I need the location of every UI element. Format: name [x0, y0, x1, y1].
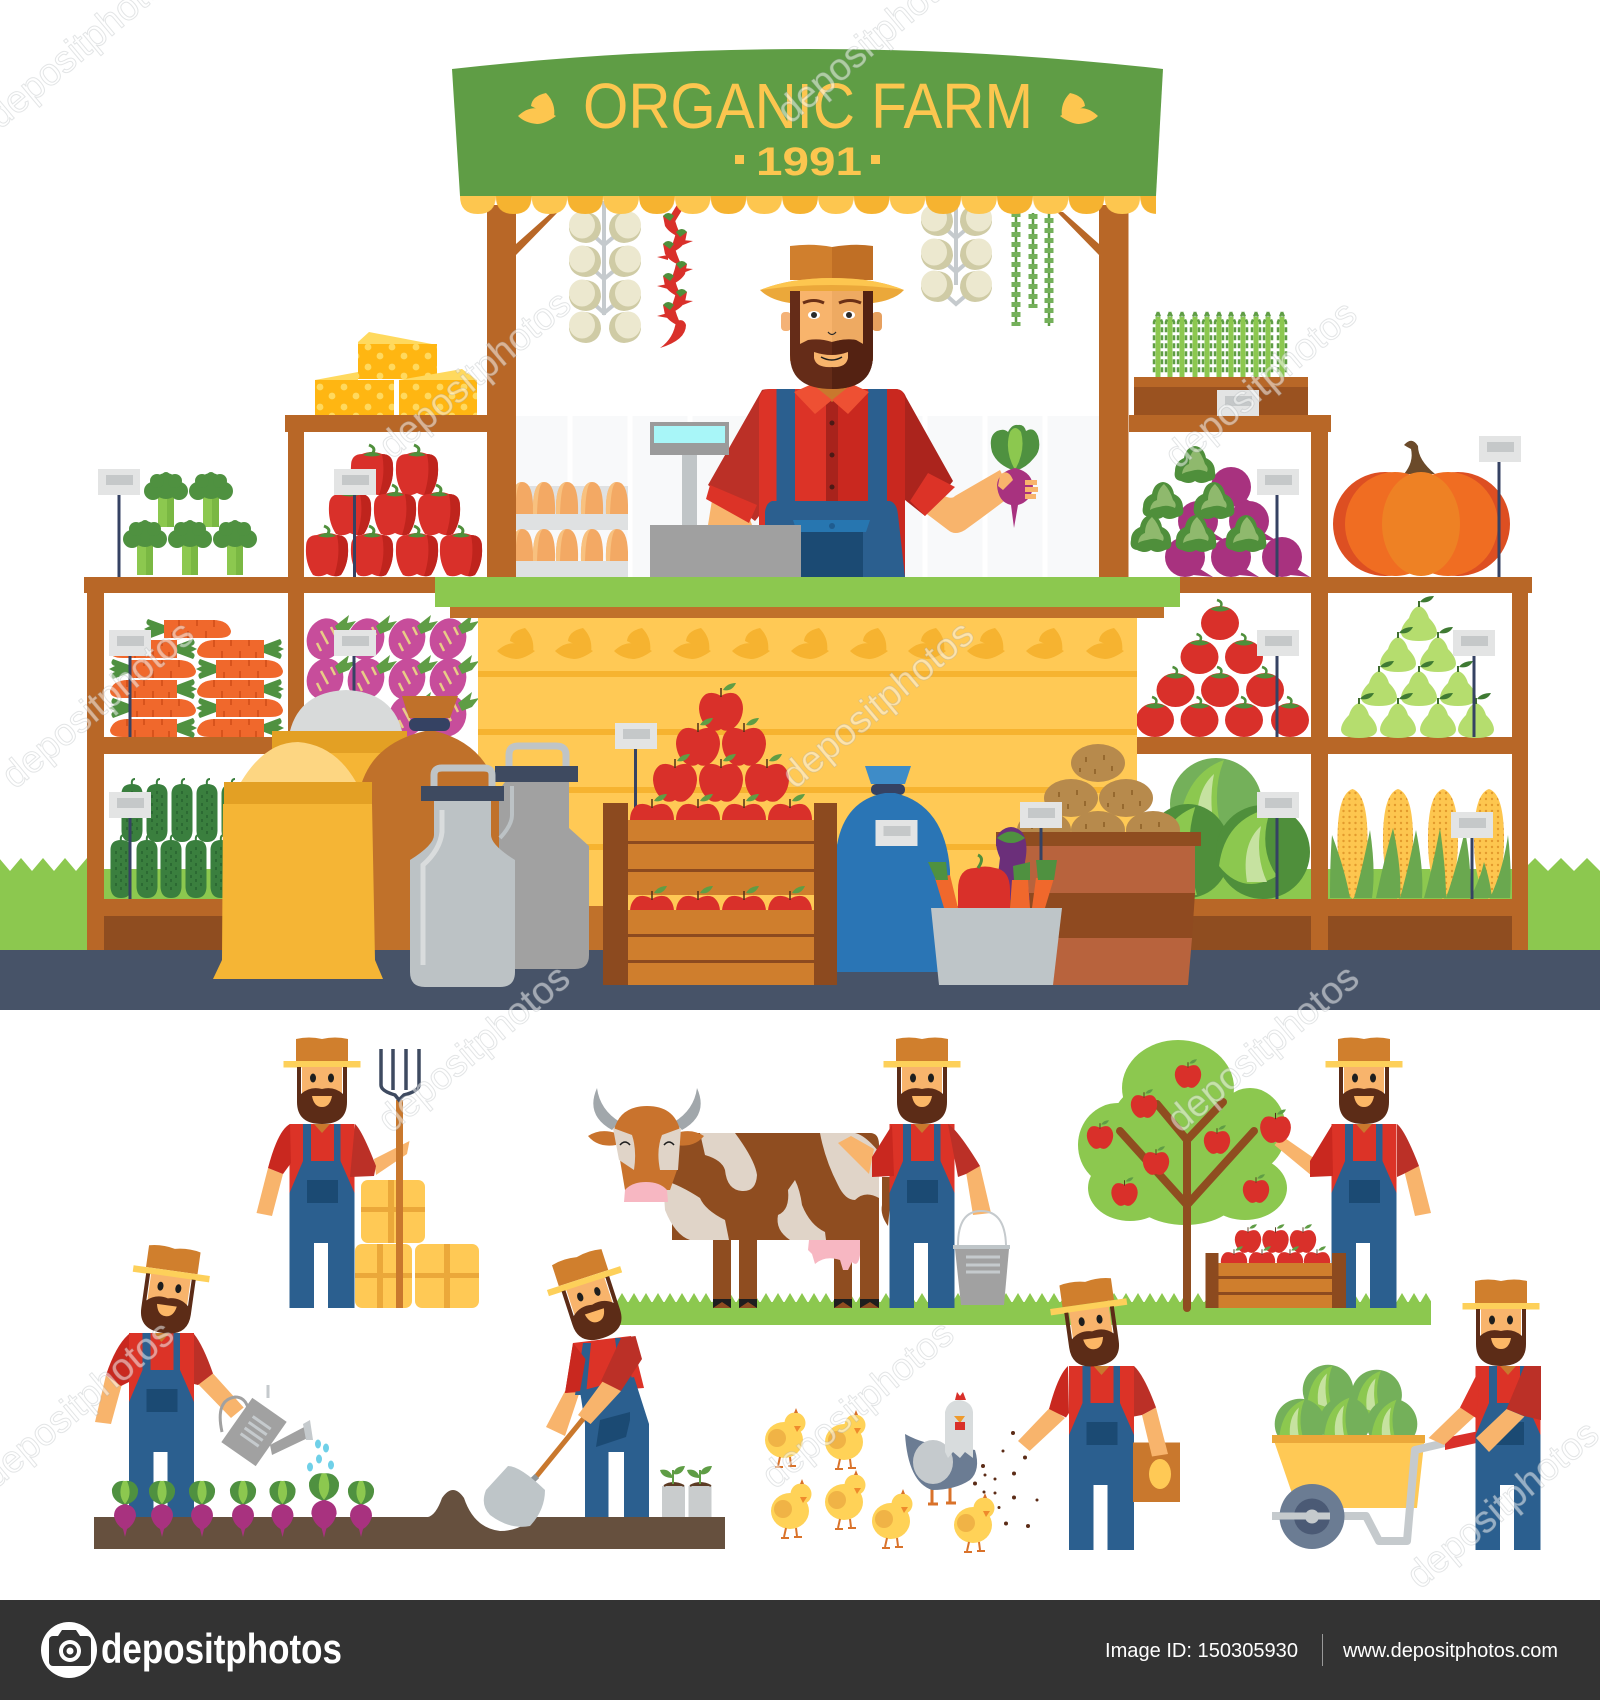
- year: 1991: [756, 140, 862, 184]
- asparagus box: [1134, 312, 1308, 416]
- stall back wall: [516, 416, 1100, 577]
- farmer with watering can: [95, 1242, 334, 1517]
- milk bucket: [953, 1211, 1010, 1305]
- logo icon: [41, 1622, 97, 1678]
- brown sack: [358, 696, 499, 950]
- right shelving: [1129, 415, 1532, 950]
- potatoes: [1017, 744, 1180, 849]
- watermarks: depositphotos: [370, 957, 578, 1141]
- watermarks: depositphotos: [1157, 293, 1365, 477]
- watering can: [220, 1385, 313, 1466]
- market counter: [435, 577, 1180, 950]
- back grain sack with flour: [272, 690, 407, 793]
- farmer head with hat and beard: [760, 245, 904, 389]
- watermarks: depositphotos: [371, 283, 579, 467]
- farmer pushing wheelbarrow: [1429, 1280, 1541, 1550]
- beets with price tag: [1131, 446, 1310, 577]
- carrots with price tag: [109, 619, 284, 738]
- small apple crate: [1206, 1224, 1346, 1308]
- scalloped awning edge: [460, 196, 1156, 214]
- cabbages with price tag: [1146, 758, 1310, 899]
- farmer milking with bucket: [838, 1038, 1010, 1308]
- hanging garlic right: [921, 204, 992, 304]
- cow: [588, 1088, 890, 1308]
- farmer shopkeeper: [706, 245, 1039, 577]
- apple tree: [1078, 1040, 1287, 1308]
- image id: Image ID: 150305930: [1105, 1640, 1298, 1662]
- title: ORGANIC FARM: [583, 70, 1033, 142]
- cash register scale: [650, 422, 801, 577]
- left shelving: [84, 415, 487, 950]
- seed bag: [1133, 1442, 1180, 1502]
- basket: [996, 832, 1201, 985]
- hanging herb vines: [1016, 205, 1049, 326]
- blue sack: [837, 766, 950, 972]
- sign banner: [452, 49, 1163, 214]
- front grain sack: [213, 742, 383, 979]
- hay bales: [355, 1180, 479, 1308]
- garden soil with mound: [94, 1490, 725, 1549]
- watermarks: depositphotos: [1159, 957, 1367, 1141]
- banner leaf icon left: [518, 93, 556, 124]
- shovel: [484, 1416, 586, 1527]
- beetroot in farmer's hand: [991, 425, 1039, 528]
- logo wordmark: depositphotos: [101, 1625, 342, 1672]
- grass strip: [616, 1293, 1431, 1325]
- milk can silver: [410, 768, 515, 987]
- website: www.depositphotos.com: [1342, 1640, 1558, 1662]
- chicks: [765, 1408, 994, 1552]
- banner leaf icon right: [1060, 93, 1098, 124]
- cucumbers with price tag: [104, 779, 242, 899]
- wooden apple crate: [603, 794, 837, 985]
- panel: market stall scene: [0, 49, 1600, 1010]
- cheese wedges: [315, 332, 477, 415]
- farmer picking apples: [1260, 1038, 1431, 1308]
- corn with price tag: [1330, 789, 1511, 899]
- hen: [905, 1392, 977, 1504]
- pumpkin with price tag: [1333, 436, 1521, 577]
- hanging garlic left: [569, 201, 641, 343]
- panel: farm activity scenes: [94, 1038, 1541, 1552]
- tomatoes with price tag: [1136, 600, 1309, 737]
- footer bar: [0, 1600, 1600, 1700]
- watermarks: depositphotos: [0, 613, 202, 797]
- stall posts and braces: [487, 205, 1128, 577]
- apple pyramid with price tag: [615, 683, 789, 815]
- broccoli with price tag: [98, 469, 257, 577]
- hanging chili peppers: [657, 205, 693, 348]
- seedling pots: [660, 1466, 712, 1517]
- turnips with price tag: [301, 613, 479, 742]
- red peppers with price tag: [306, 445, 482, 577]
- watermarks: depositphotos: [754, 1313, 962, 1497]
- milk can grey: [495, 746, 589, 969]
- pitchfork: [381, 1049, 419, 1308]
- scattered seeds: [973, 1431, 1038, 1528]
- eggs on trays: [511, 482, 628, 577]
- farmer with pitchfork: [256, 1038, 419, 1308]
- wheelbarrow with cabbages: [1272, 1365, 1481, 1549]
- beet row: [112, 1473, 374, 1538]
- pears with price tag: [1341, 596, 1495, 738]
- year: [735, 140, 880, 184]
- farmer body: shirt, overalls and arms: [706, 384, 1012, 577]
- farmer digging with shovel: [484, 1244, 649, 1527]
- vegetable tin bucket: [928, 802, 1062, 985]
- watermarks: depositphotos: [774, 613, 982, 797]
- water drops: [307, 1440, 334, 1472]
- farmer feeding chickens: [1018, 1275, 1180, 1550]
- ground: grass and road: [0, 858, 1600, 1010]
